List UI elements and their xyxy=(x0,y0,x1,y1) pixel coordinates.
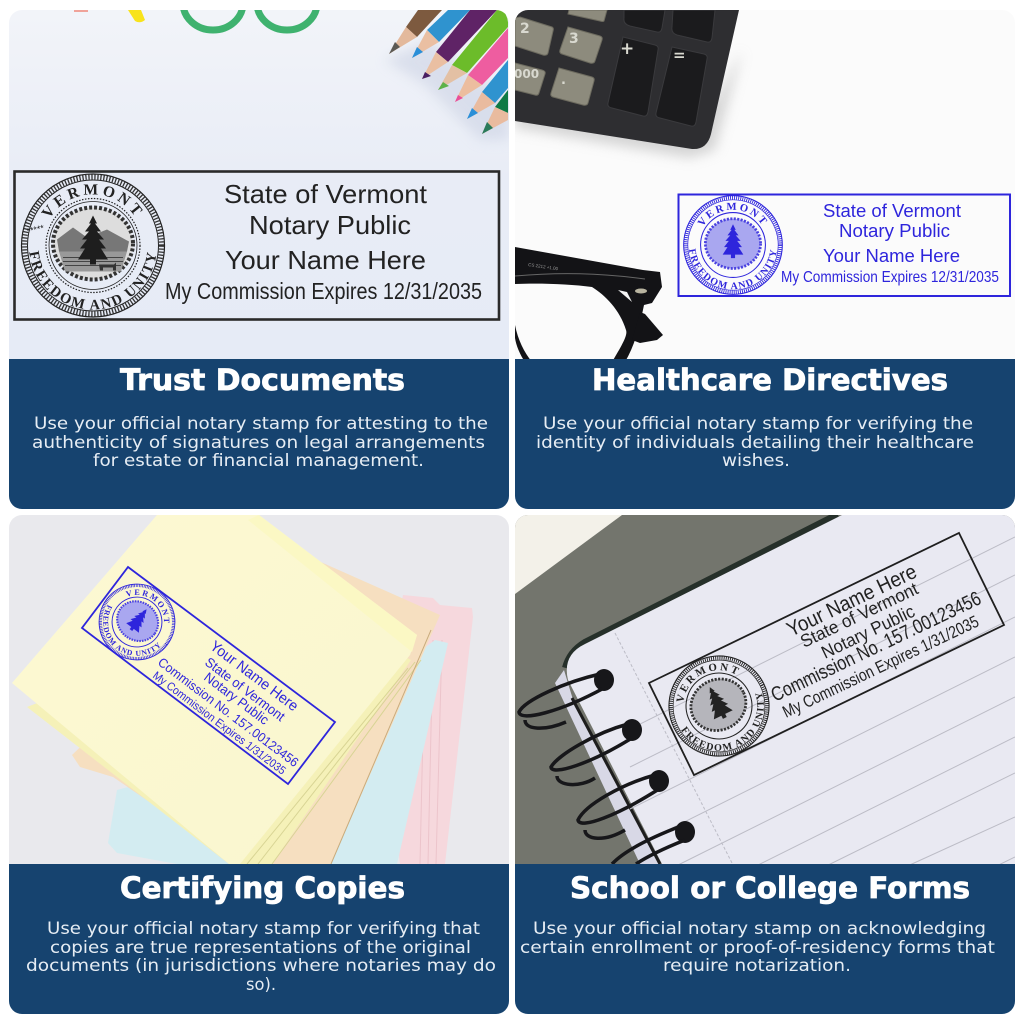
stamp text lines: My Commission Expires 12/31/2035 xyxy=(165,278,482,304)
description: for estate or financial management. xyxy=(93,451,424,471)
stamp text lines: My Commission Expires 1/31/2035 xyxy=(780,612,982,722)
photo background: stacked coloured paper xyxy=(9,515,509,865)
stamp text lines: Your Name Here xyxy=(207,638,301,715)
stamp text lines: Commission No. 157.00123456 xyxy=(155,654,302,770)
stamp text lines: Your Name Here xyxy=(783,560,920,642)
glasses: CS 2212 +1.00 xyxy=(528,262,559,271)
black notary stamp impression xyxy=(13,170,500,321)
stamp text lines: Commission No. 157.00123456 xyxy=(768,588,985,707)
stamp text lines: State of Vermont xyxy=(202,654,288,724)
heading: Trust Documents xyxy=(120,363,405,397)
heading: School or College Forms xyxy=(570,871,970,905)
caption band xyxy=(9,359,509,509)
heading: Healthcare Directives xyxy=(592,363,948,397)
panel: healthcare directives xyxy=(515,10,1015,509)
stamp text lines: Notary Public xyxy=(818,601,918,663)
pencils xyxy=(389,10,508,134)
description: authenticity of signatures on legal arrangements xyxy=(32,433,485,453)
seal: Vermont: FREEDOM AND UNITY xyxy=(103,604,160,656)
seal: Vermont: VERMONT xyxy=(697,202,768,224)
seal: Vermont: ***** xyxy=(26,223,45,236)
blue notary stamp impression xyxy=(80,566,336,786)
stamp text lines: State of Vermont xyxy=(823,201,961,221)
photo background: calculator and glasses: 2 xyxy=(520,21,530,37)
seal: Vermont: VERMONT xyxy=(41,184,143,216)
panel: school or college forms xyxy=(515,515,1015,1014)
description: certain enrollment or proof-of-residency forms that xyxy=(520,938,995,958)
description: identity of individuals detailing their healthcare xyxy=(536,433,974,453)
panel: certifying copies xyxy=(9,515,509,1014)
caption band xyxy=(515,864,1015,1014)
photo background: calculator and glasses: + xyxy=(620,39,634,59)
seal: Vermont: FREEDOM AND UNITY xyxy=(688,248,776,290)
black notary stamp impression xyxy=(648,532,1006,776)
stamp text lines: Notary Public xyxy=(201,669,272,728)
photo background: desk with pencils xyxy=(9,0,509,360)
spiral rings xyxy=(519,669,695,864)
seal: Vermont xyxy=(668,655,770,757)
stamp text lines: State of Vermont xyxy=(224,179,428,209)
stamp text lines: Your Name Here xyxy=(823,246,960,266)
seal: Vermont: VERMONT xyxy=(676,663,740,702)
heading: Certifying Copies xyxy=(120,871,405,905)
photo background: calculator and glasses xyxy=(515,10,744,359)
description: Use your official notary stamp on acknowledging xyxy=(533,919,986,939)
description: documents (in jurisdictions where notaries may do xyxy=(26,956,496,976)
photo background: calculator and glasses: 000 xyxy=(514,67,539,81)
description: Use your official notary stamp for verifying that xyxy=(47,919,480,939)
seal: Vermont: FREEDOM AND UNITY xyxy=(681,693,764,751)
photo background: calculator and glasses: = xyxy=(673,46,686,64)
stamp text lines: My Commission Expires 1/31/2035 xyxy=(150,670,288,777)
description xyxy=(26,919,496,995)
description: require notarization. xyxy=(663,956,851,976)
caption band xyxy=(9,864,509,1014)
panel: trust documents xyxy=(9,10,509,509)
description xyxy=(32,414,488,471)
seal: Vermont xyxy=(98,584,176,660)
calculator xyxy=(515,10,739,149)
photo background: calculator and glasses: 3 xyxy=(569,31,579,47)
stamp text lines xyxy=(781,201,999,286)
description xyxy=(538,416,973,466)
description: Use your official notary stamp for attesting to the xyxy=(34,414,488,434)
stamp text lines xyxy=(165,179,482,304)
seal: Vermont xyxy=(683,196,783,295)
caption band xyxy=(515,359,1015,509)
blue notary stamp impression xyxy=(678,194,1011,297)
description xyxy=(520,919,995,976)
glasses xyxy=(515,247,663,362)
description: Use your official notary stamp for verifying the xyxy=(543,414,973,434)
stamp text lines: State of Vermont xyxy=(797,578,921,652)
description: wishes. xyxy=(722,451,790,471)
stamp text lines: Notary Public xyxy=(839,221,950,241)
seal: Vermont: FREEDOM AND UNITY xyxy=(29,250,156,310)
seal: Vermont: VERMONT xyxy=(125,590,170,623)
description: copies are true representations of the original xyxy=(50,938,471,958)
photo background: spiral notebook xyxy=(515,515,1015,884)
description: so). xyxy=(246,975,276,995)
photo background: calculator and glasses: . xyxy=(561,73,566,88)
stamp text lines: Notary Public xyxy=(249,210,411,240)
seal: Vermont xyxy=(20,173,166,318)
stamp text lines: Your Name Here xyxy=(225,245,426,275)
